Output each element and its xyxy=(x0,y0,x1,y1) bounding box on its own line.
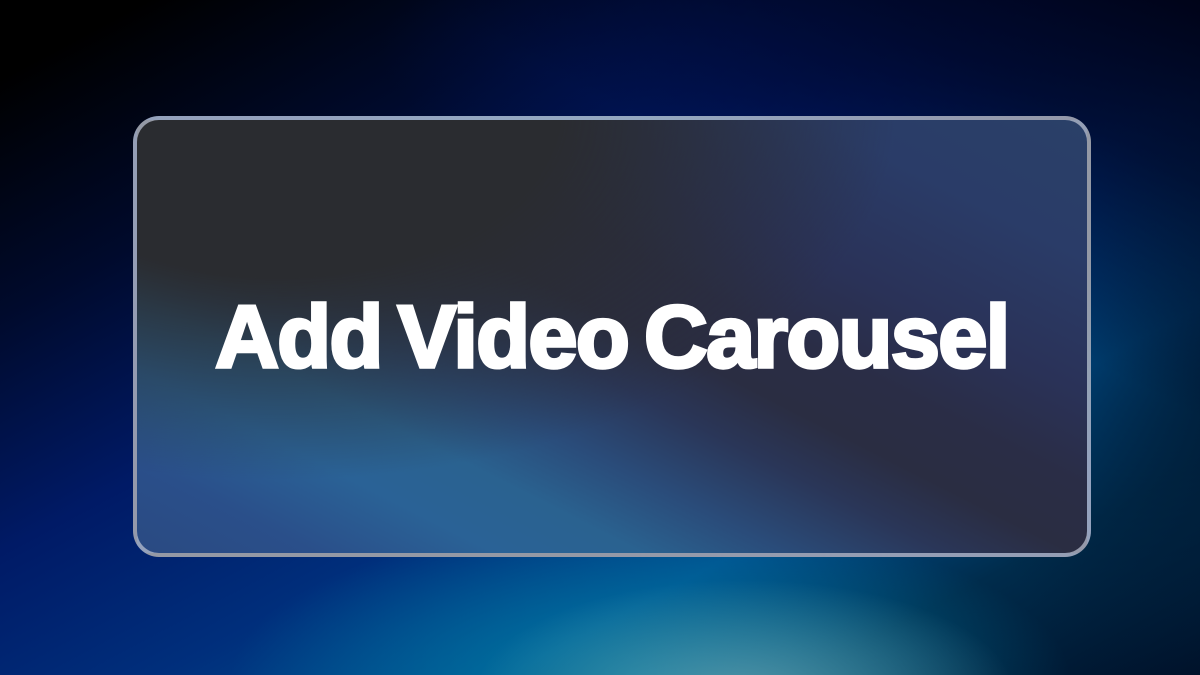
title: Add Video Carousel xyxy=(215,286,1009,386)
panel: frosted glass card xyxy=(133,116,1091,557)
